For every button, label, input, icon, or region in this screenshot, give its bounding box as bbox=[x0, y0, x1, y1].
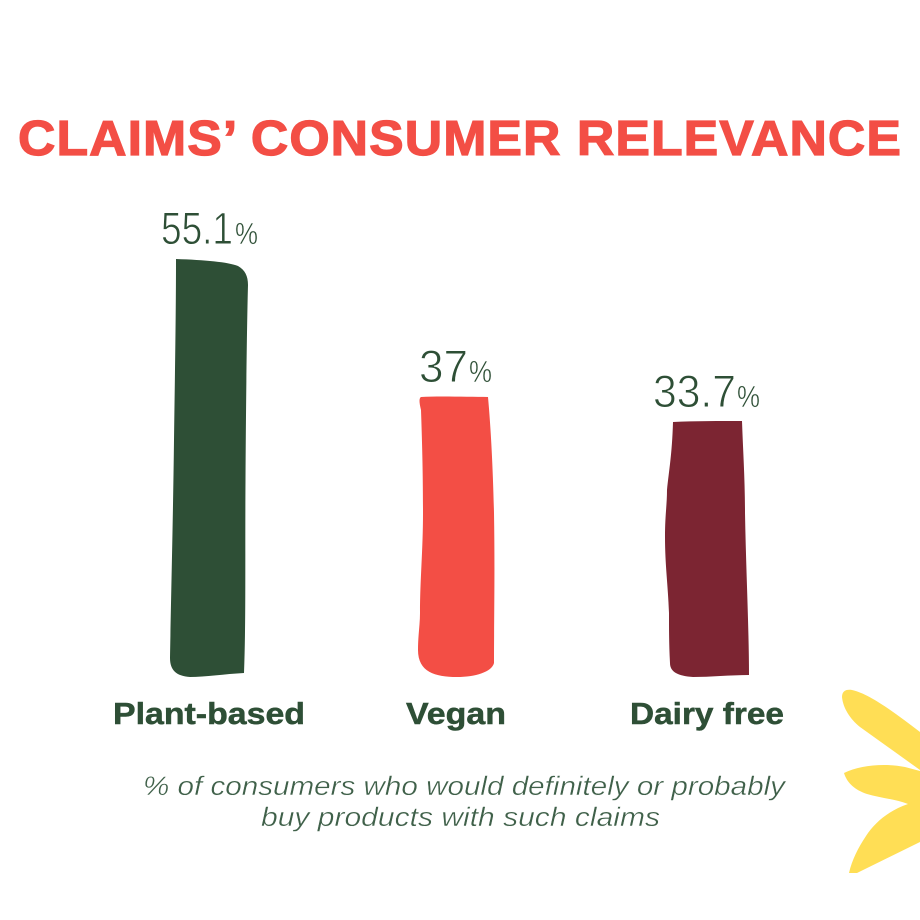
value: 33.7%: 33.7 bbox=[653, 366, 736, 417]
icon: yellow flower bbox=[842, 690, 920, 873]
title: CLAIMS’ CONSUMER RELEVANCE bbox=[18, 112, 902, 166]
label: Plant-based: Plant-based bbox=[113, 696, 305, 731]
value: 55.1%: 55.1 bbox=[161, 203, 233, 254]
bar: Plant-based bbox=[170, 259, 248, 677]
label: Dairy free: Dairy free bbox=[630, 696, 784, 731]
value: 33.7%: % bbox=[737, 379, 760, 414]
caption: buy products with such claims bbox=[261, 802, 660, 832]
value: 55.1%: % bbox=[235, 216, 258, 251]
bar: Dairy free bbox=[665, 421, 749, 677]
value: 37%: 37 bbox=[419, 341, 468, 392]
caption: % of consumers who would definitely or probably bbox=[143, 771, 787, 801]
bar: Vegan bbox=[418, 397, 494, 677]
value: 37% bbox=[419, 341, 492, 392]
label: Vegan: Vegan bbox=[406, 696, 506, 731]
caption bbox=[143, 771, 787, 832]
value: 37%: % bbox=[469, 354, 492, 389]
